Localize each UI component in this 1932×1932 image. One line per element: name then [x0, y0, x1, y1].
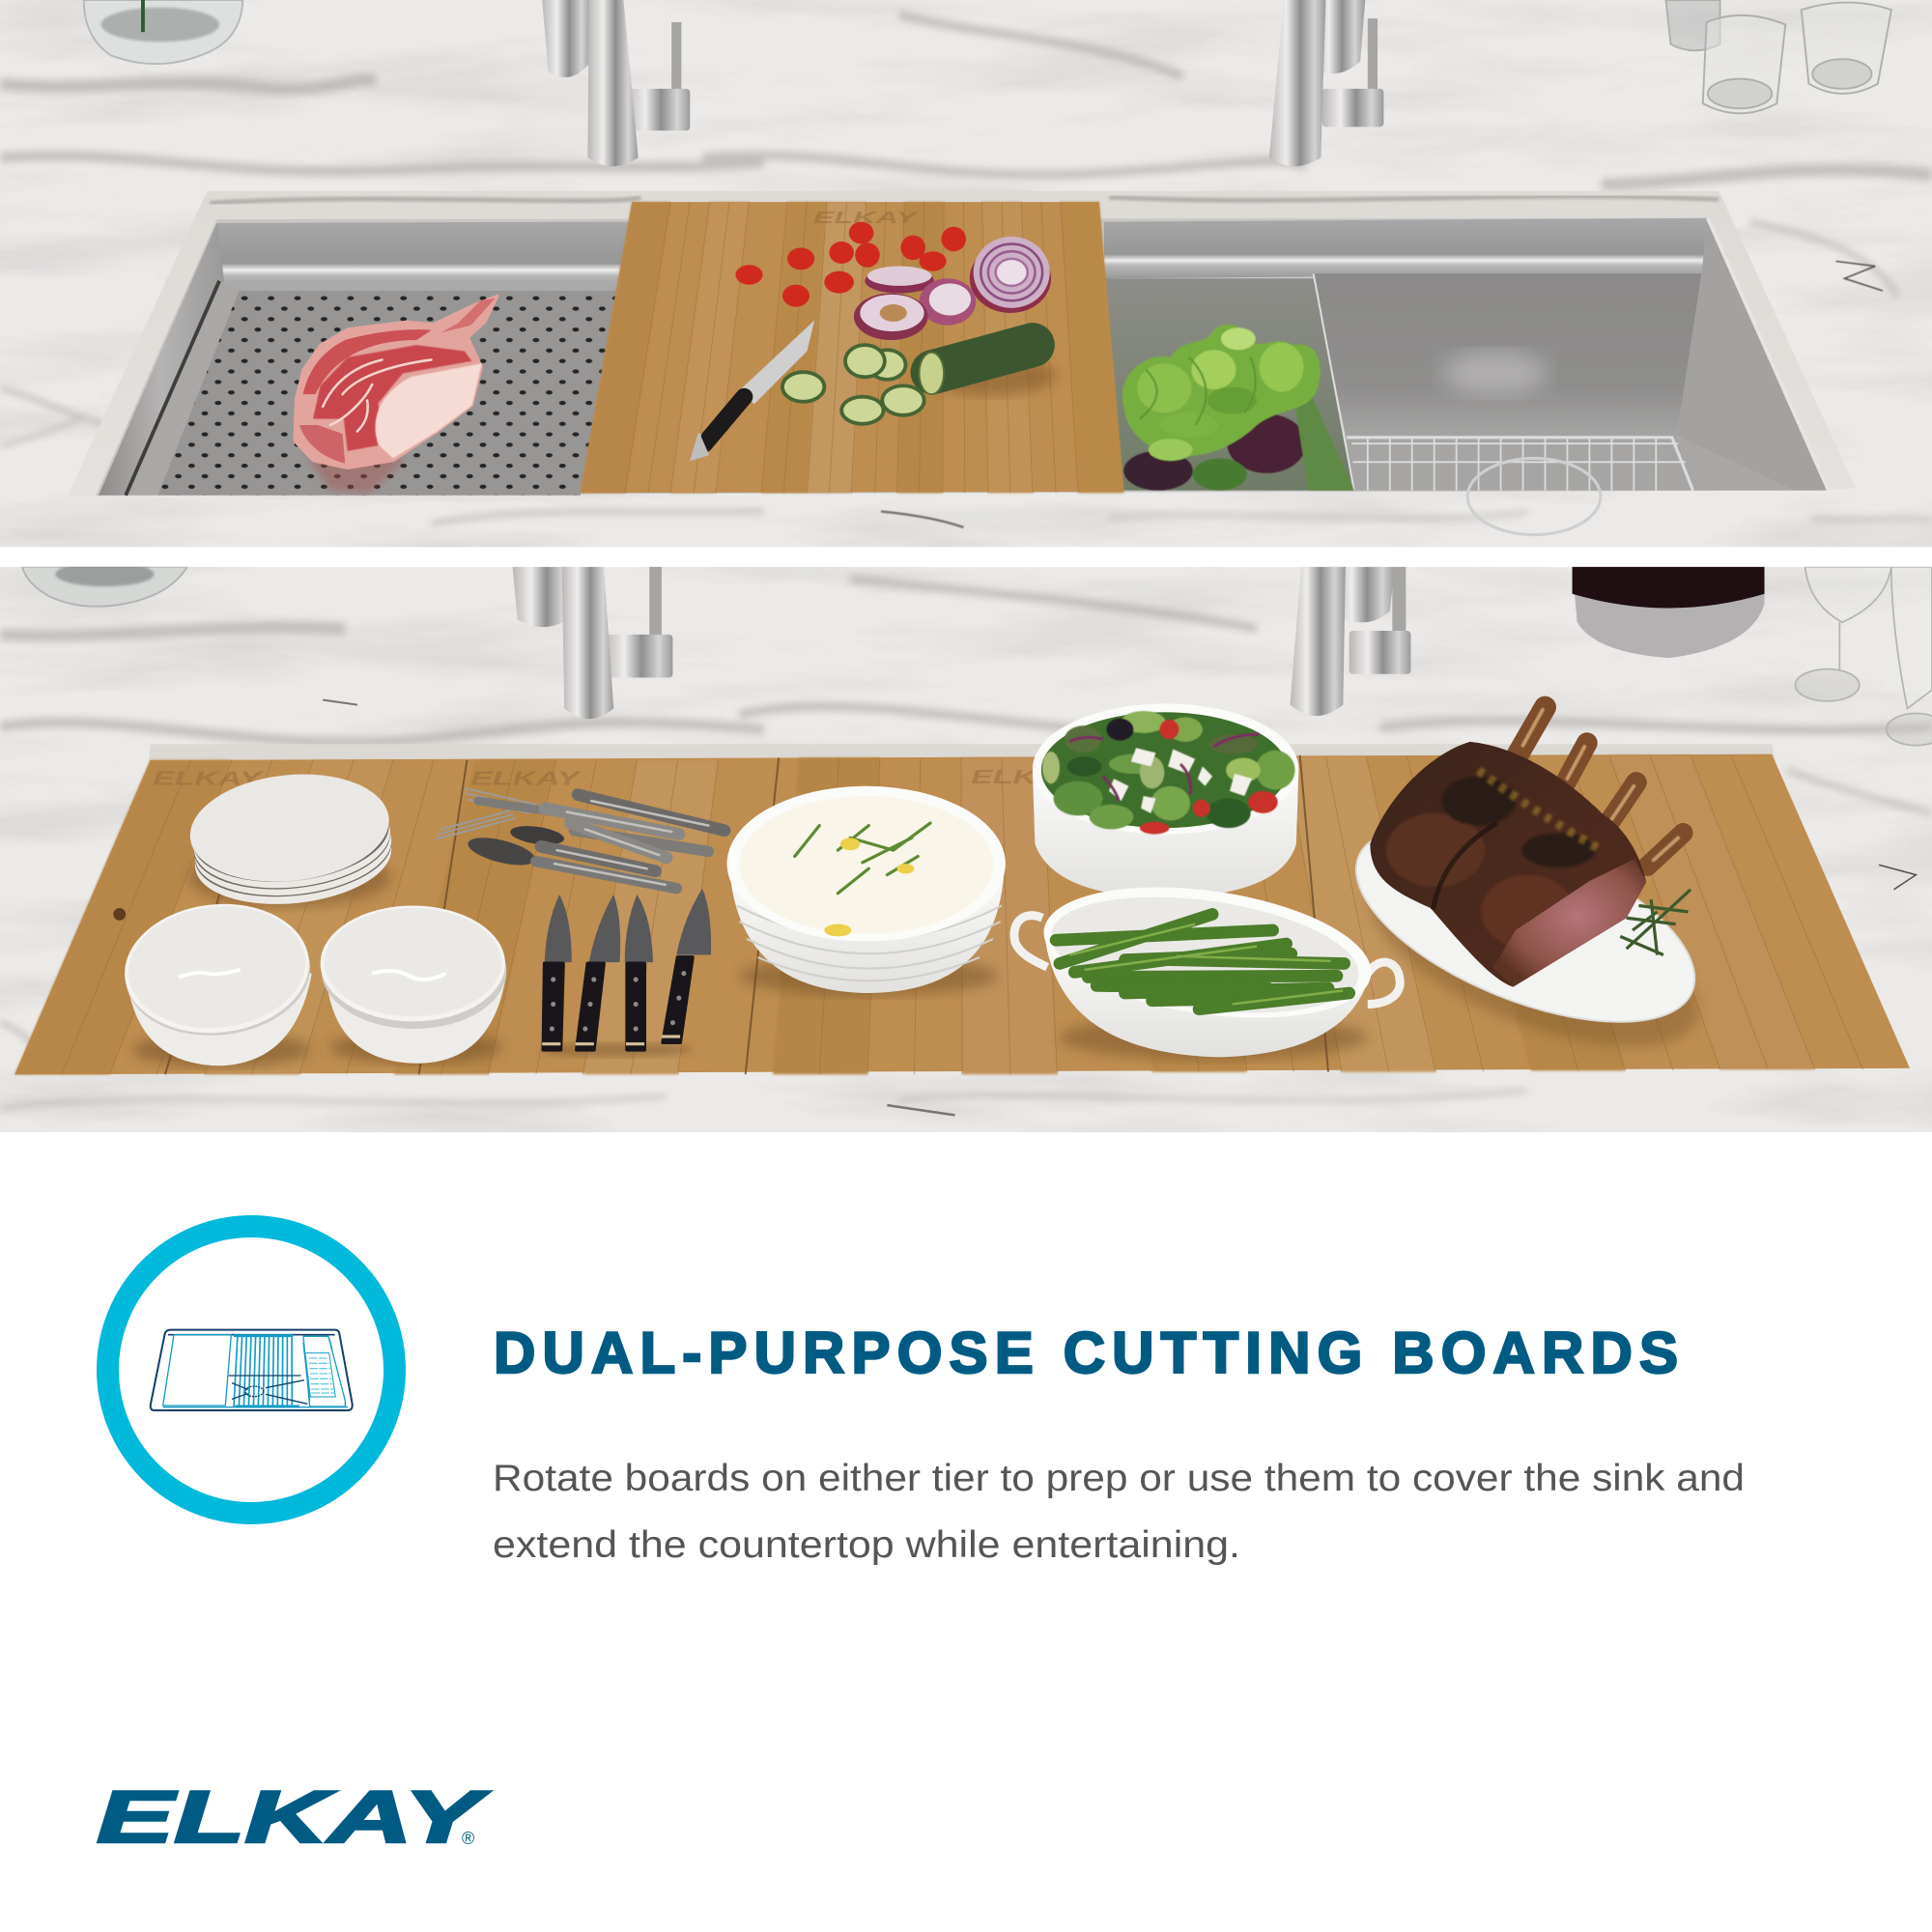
perforated tray	[157, 291, 618, 496]
board engraved logos: ELKAY	[153, 768, 265, 789]
fat	[375, 363, 482, 458]
heading: DUAL-PURPOSE CUTTING BOARDS	[494, 1321, 1678, 1385]
muscle	[313, 345, 472, 451]
roast crust texture	[1386, 770, 1602, 949]
right wall	[1677, 218, 1829, 491]
logo: Elkay: ELKAY	[97, 1776, 491, 1859]
lettuce	[1122, 325, 1354, 491]
sink lip	[148, 744, 1776, 770]
body text: extend the countertop while entertaining.	[493, 1524, 1240, 1566]
logo: Elkay	[97, 1776, 491, 1859]
body text: Rotate boards on either tier to prep or use them to cover the sink and	[493, 1458, 1745, 1499]
dark wine decanter	[1573, 567, 1765, 658]
chef knife	[693, 321, 814, 458]
wine glasses	[1795, 567, 1932, 746]
platter with roast	[1330, 707, 1722, 1085]
rosemary sprig	[1620, 890, 1690, 955]
glass bowl	[22, 562, 187, 607]
icon: sink in cyan ring	[108, 1227, 394, 1513]
photo area	[0, 0, 1932, 1132]
logo: Elkay: ®	[462, 1829, 474, 1848]
drinking glasses	[1665, 0, 1891, 113]
board engraved logo: ELKAY	[813, 208, 921, 227]
sink recess lip	[68, 191, 1856, 496]
salad leaves	[1042, 711, 1295, 835]
left back wall	[216, 222, 628, 281]
board engraved logos: ELKAY	[470, 768, 582, 789]
left side wall	[99, 223, 224, 496]
faucet: bottom right	[1290, 567, 1410, 716]
cutlery	[437, 788, 724, 889]
bowls	[118, 895, 506, 1067]
glass vase: top left	[84, 0, 242, 64]
faucet: top left	[542, 0, 690, 166]
faucet: bottom left	[513, 567, 672, 719]
rib bones	[1518, 707, 1683, 867]
marble countertop	[0, 567, 1932, 1132]
cut face	[1493, 859, 1646, 987]
marble countertop	[0, 0, 1932, 547]
wire rack	[1347, 438, 1693, 535]
panel: bottom sink photo	[0, 562, 1932, 1132]
main basin wall	[1314, 273, 1701, 437]
colander wall	[1104, 278, 1355, 491]
panel: top sink photo	[0, 0, 1932, 547]
tomatoes	[735, 222, 966, 307]
board engraved logos: ELKAY	[971, 767, 1083, 788]
board engraved logos	[153, 767, 1083, 790]
faucet: top right	[1269, 0, 1383, 166]
extended bamboo board surface	[14, 754, 1910, 1074]
cutting board	[581, 202, 1123, 493]
asparagus dish	[1014, 868, 1400, 1060]
sink basin	[96, 218, 1829, 496]
plate stack	[185, 765, 396, 913]
body text	[493, 1458, 1745, 1566]
steak knives	[540, 889, 711, 1057]
cap muscle	[303, 329, 431, 394]
mashed potato bowl	[727, 786, 1006, 996]
sink line drawing	[151, 1330, 353, 1410]
right back wall	[1104, 218, 1708, 278]
red onion	[854, 237, 1051, 340]
cucumber	[782, 345, 1056, 424]
meat	[295, 296, 497, 493]
salad bowl	[1033, 703, 1298, 898]
ring	[108, 1227, 394, 1513]
